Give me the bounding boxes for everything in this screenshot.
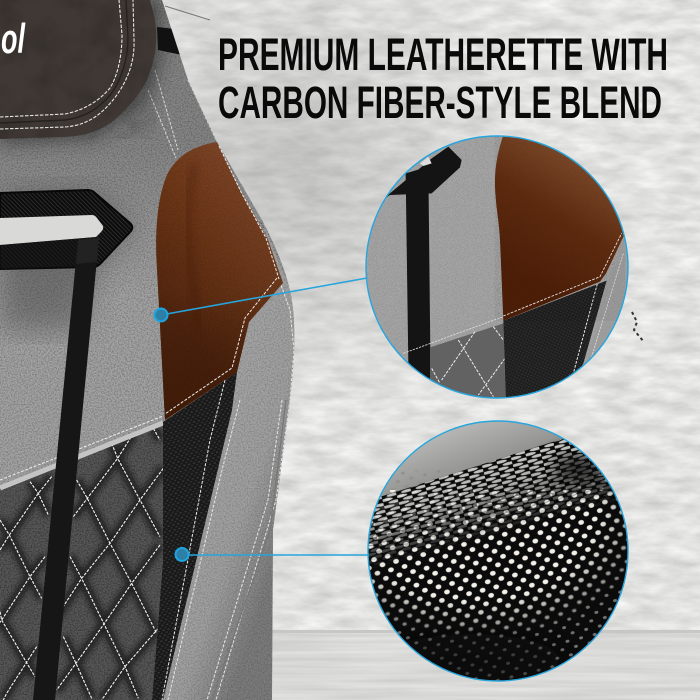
headrest logo text: ol bbox=[1, 15, 26, 62]
zoom circle: carbon fiber detail bbox=[367, 420, 629, 682]
weave highlights bbox=[368, 439, 616, 568]
headrest bbox=[0, 0, 182, 146]
brown bbox=[495, 130, 625, 321]
seam between panels bbox=[0, 416, 163, 488]
grey leather strip bbox=[380, 422, 562, 497]
seat grain bbox=[0, 0, 300, 700]
carbon bbox=[503, 281, 607, 407]
seat back grey upholstery bbox=[0, 0, 300, 700]
leader line: leather bbox=[154, 278, 367, 322]
dim dots bbox=[370, 470, 627, 680]
cutout frame bbox=[387, 146, 462, 197]
seat bbox=[0, 0, 300, 700]
diamond stitching bbox=[0, 428, 163, 700]
quilted panel bbox=[430, 323, 506, 400]
carbon strip bbox=[152, 372, 237, 700]
quilted diamond panel bbox=[0, 420, 170, 700]
headrest strap bbox=[157, 27, 182, 55]
dark corner bbox=[552, 454, 604, 482]
leader line: carbon bbox=[176, 548, 368, 561]
title bbox=[218, 29, 668, 128]
frame shadow bbox=[0, 190, 132, 330]
brown leather panel bbox=[156, 142, 283, 420]
headrest cutout frame bbox=[0, 190, 132, 269]
outer bolster bbox=[163, 220, 296, 700]
side bolster bbox=[588, 248, 628, 360]
zoom circle: leather detail bbox=[365, 135, 629, 399]
upper stitched seams bbox=[148, 70, 217, 158]
floor bbox=[0, 630, 700, 700]
strap bbox=[406, 167, 431, 383]
bright dots bbox=[368, 490, 627, 637]
black strap bbox=[33, 238, 99, 700]
